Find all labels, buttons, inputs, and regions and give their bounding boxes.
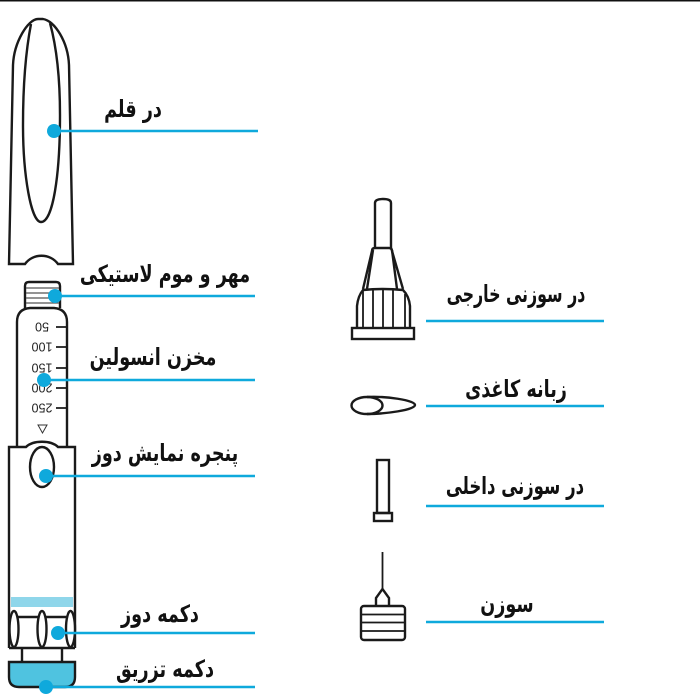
insulin cartridge: 150: [32, 360, 52, 374]
label: outer needle cap: در سوزنی خارجی: [447, 280, 585, 308]
callout: pen cap: در قلم: [104, 95, 162, 123]
inner needle cap: [374, 460, 392, 521]
callout: dose window: [39, 439, 255, 483]
insulin cartridge: 100: [32, 340, 52, 354]
insulin cartridge: 250: [32, 400, 52, 414]
needle: [361, 552, 405, 640]
callout: rubber seal: [48, 260, 255, 303]
callout: rubber seal: مهر و موم لاستیکی: [80, 260, 250, 288]
callout: dose window: پنجره نمایش دوز: [91, 439, 238, 467]
label: needle: سوزن: [480, 590, 534, 618]
callout: insulin cartridge: مخزن انسولین: [90, 343, 216, 371]
paper tab: [352, 397, 415, 414]
dose knob: [9, 611, 75, 661]
label: inner needle cap: در سوزنی داخلی: [446, 472, 584, 500]
callout: injection button: [39, 655, 255, 694]
insulin cartridge: 200: [32, 380, 52, 394]
callout: pen cap: [47, 95, 258, 138]
injection button: [9, 662, 75, 687]
callout: injection button: دکمه تزریق: [116, 655, 214, 683]
label: paper tab: زبانه کاغذی: [465, 375, 567, 403]
callout: dose knob: دکمه دوز: [120, 600, 199, 628]
insulin cartridge: [17, 308, 67, 447]
pen body: [9, 442, 75, 648]
callout: insulin cartridge: [37, 343, 255, 387]
pen cap: [9, 19, 73, 264]
insulin cartridge: 50: [35, 320, 49, 334]
callout: dose knob: [51, 600, 255, 640]
rubber seal: [25, 282, 60, 308]
outer needle cap: [352, 199, 414, 339]
